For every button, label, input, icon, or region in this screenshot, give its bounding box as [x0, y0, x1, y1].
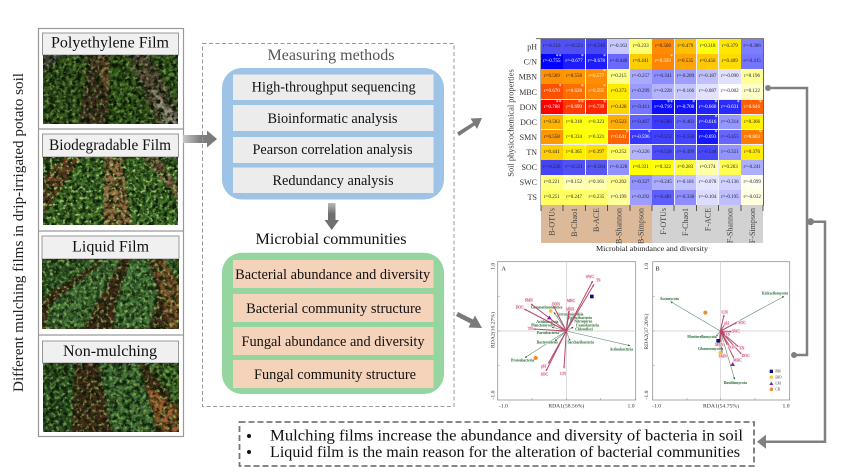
- callout: conclusions: Mulching films increase the abundance and diversity of bacteria in soil: [270, 428, 743, 445]
- heatmap: correlation matrix: r=0.196: [744, 74, 760, 79]
- heatmap: correlation matrix: r=-0.660: [699, 105, 716, 110]
- heatmap: correlation matrix: r=0.379: [722, 44, 738, 49]
- chart: RDA plot B: RDA2(37.20%): [643, 314, 650, 350]
- heatmap: correlation matrix: r=0.221: [544, 180, 560, 185]
- chart: RDA plot B: -1.0: [644, 390, 650, 399]
- heatmap: correlation matrix: r=0.247: [566, 195, 582, 200]
- heatmap: correlation matrix: *: [648, 130, 651, 136]
- heatmap: correlation matrix: r=0.366: [744, 120, 760, 125]
- connector: heatmap and RDA to conclusions: [757, 85, 825, 449]
- panel: microbial communities list: [222, 253, 444, 394]
- heatmap: correlation matrix: r=-0.136: [721, 180, 739, 185]
- chart: RDA plot A: Patescibacteria: [568, 316, 592, 320]
- panel: microbial communities list: Fungal community structure: [254, 367, 416, 383]
- heatmap: correlation matrix: r=0.373: [611, 89, 626, 94]
- chart: RDA plot A: A: [501, 265, 506, 272]
- chart: RDA plot B: DON: [728, 345, 736, 349]
- heatmap: correlation matrix: *: [625, 130, 628, 136]
- heatmap: correlation matrix: r=0.174: [700, 165, 716, 170]
- heatmap: correlation matrix: r=-0.241: [743, 165, 761, 170]
- heatmap: correlation matrix: r=0.161: [588, 180, 604, 185]
- heatmap: correlation matrix: *: [714, 130, 717, 136]
- heatmap: correlation matrix: r=-0.341: [654, 74, 672, 79]
- heatmap: correlation matrix: *: [714, 115, 717, 121]
- heatmap: correlation matrix: r=0.215: [611, 74, 626, 79]
- panel: polyethylene film: Polyethylene Film: [51, 35, 169, 52]
- heatmap: correlation matrix: r=0.628: [566, 89, 582, 94]
- heatmap: correlation matrix: r=0.376: [744, 150, 760, 155]
- heatmap: correlation matrix: r=-0.292: [632, 195, 650, 200]
- heatmap: correlation matrix: r=-0.228: [654, 89, 672, 94]
- heatmap axes and labels: SMN: [520, 133, 537, 142]
- heatmap: correlation matrix: r=0.535: [678, 59, 693, 64]
- chart: RDA plot A: Bacteroidetes: [537, 340, 558, 344]
- heatmap: correlation matrix: **: [556, 54, 562, 60]
- chart: RDA plot B: SOC: [738, 321, 746, 325]
- chart: RDA plot A: RDA1(58.56%): [548, 402, 584, 409]
- heatmap: correlation matrix: r=-0.523: [565, 44, 583, 49]
- heatmap axes and labels: DOC: [520, 118, 537, 127]
- heatmap axes and labels: pH: [527, 42, 537, 52]
- arrow: methods to communities: [324, 203, 339, 230]
- heatmap: correlation matrix: r=0.479: [678, 44, 693, 49]
- heatmap: correlation matrix: r=-0.299: [632, 89, 650, 94]
- panel: measuring methods list: Pearson correlation analysis: [252, 142, 413, 158]
- legend: [769, 370, 782, 392]
- heatmap: correlation matrix: r=0.646: [744, 105, 760, 110]
- panel: methods dashed frame: [202, 44, 454, 406]
- heatmap: correlation matrix: r=0.523: [611, 120, 626, 125]
- heatmap: correlation matrix: r=0.569: [544, 74, 560, 79]
- heatmap: correlation matrix: r=-0.032: [743, 195, 761, 200]
- heatmap: correlation matrix: r=-0.002: [721, 89, 739, 94]
- heatmap: correlation matrix: r=0.397: [588, 150, 604, 155]
- panel: polyethylene film: [42, 33, 178, 124]
- heatmap: correlation matrix: r=-0.588: [654, 120, 672, 125]
- chart: RDA plot A: SOC: [541, 372, 548, 376]
- chart: RDA plot B: RDA1(54.75%): [703, 402, 739, 409]
- heatmap axes and labels: Microbial abundance and diversity: [596, 244, 708, 253]
- chart: RDA plot A: DOC: [516, 306, 524, 310]
- heatmap: correlation matrix: r=0.577: [588, 74, 604, 79]
- chart: RDA plot B: TN: [739, 347, 744, 351]
- heatmap: correlation matrix: r=0.558: [566, 74, 582, 79]
- heatmap: correlation matrix: r=-0.327: [632, 180, 650, 185]
- chart: RDA plot B: SWC: [732, 330, 741, 334]
- heatmap: correlation matrix: *: [759, 130, 762, 136]
- heatmap: correlation matrix: r=-0.677: [565, 59, 583, 64]
- heatmap: correlation matrix: r=-0.549: [588, 44, 605, 49]
- chart: RDA plot A: Cyanobacteria: [576, 323, 599, 327]
- panel: biodegradable film: Biodegradable Film: [49, 137, 171, 154]
- chart: RDA plot A: RDA2(16.27%): [489, 312, 496, 348]
- heatmap: correlation matrix: *: [670, 54, 673, 60]
- heatmap: correlation matrix: r=-0.558: [543, 165, 561, 170]
- heatmap: correlation matrix: r=-0.099: [743, 180, 761, 185]
- heatmap: correlation matrix: r=-0.616: [699, 120, 716, 125]
- heatmap axes and labels: B-OTUs: [548, 208, 556, 236]
- heatmap: correlation matrix: *: [759, 100, 762, 106]
- heatmap axes and labels: TN: [526, 148, 537, 157]
- heatmap: correlation matrix: r=-0.181: [677, 180, 694, 185]
- heatmap: correlation matrix: r=0.334: [566, 135, 582, 140]
- heatmap: correlation matrix: r=-0.090: [721, 74, 739, 79]
- heatmap: correlation matrix: r=0.251: [544, 195, 560, 200]
- heatmap: correlation matrix: r=0.122: [744, 89, 760, 94]
- heatmap axes and labels: B-Chao1: [570, 208, 579, 237]
- chart: RDA plot A: Saccharibacteria: [567, 341, 594, 345]
- heatmap: correlation matrix: r=-0.415: [743, 59, 761, 64]
- chart: RDA plot B: TS: [726, 332, 730, 336]
- heatmap: correlation matrix: *: [714, 100, 717, 106]
- heatmap: correlation matrix: r=0.263: [722, 165, 738, 170]
- chart: RDA plot A: -1.0: [499, 403, 508, 409]
- heatmap: correlation matrix: r=0.283: [678, 165, 693, 170]
- heatmap: correlation matrix: r=-0.166: [677, 89, 694, 94]
- heatmap: correlation matrix: r=0.318: [566, 120, 582, 125]
- arrow: methods to heatmap: [457, 118, 482, 136]
- heatmap axes and labels: MBC: [519, 88, 537, 97]
- heatmap axes and labels: B-ACE: [592, 208, 601, 232]
- chart: RDA plot A: MBN: [566, 308, 575, 312]
- heatmap: correlation matrix: r=0.670: [544, 89, 560, 94]
- heatmap: correlation matrix: r=-0.314: [721, 120, 739, 125]
- heatmap: correlation matrix: r=-0.257: [632, 74, 650, 79]
- chart: RDA plot A: 1.0: [490, 263, 496, 270]
- heatmap: correlation matrix: r=0.580: [655, 44, 671, 49]
- heatmap: correlation matrix: r=0.699: [566, 105, 582, 110]
- heatmap: correlation matrix: r=-0.572: [654, 135, 672, 140]
- chart: RDA plot A: C/N: [560, 372, 566, 376]
- chart: RDA plot B: C/N: [722, 310, 728, 314]
- chart: RDA plot B: Mortierellomycota: [687, 335, 717, 339]
- chart: RDA plot B: 1.0: [782, 403, 790, 409]
- heatmap axes and labels: SWC: [520, 178, 537, 187]
- heatmap: correlation matrix: r=-0.693: [699, 135, 716, 140]
- chart: RDA plot A: SWC: [586, 275, 595, 279]
- heatmap axes and labels: MBN: [519, 73, 537, 82]
- heatmap: correlation matrix: r=0.409: [722, 59, 738, 64]
- chart: RDA plot B: DOC: [742, 354, 750, 358]
- heatmap: correlation matrix: r=-0.755: [543, 59, 561, 64]
- heatmap: correlation matrix: r=-0.448: [610, 59, 627, 64]
- legend: CK: [775, 388, 781, 392]
- chart: RDA plot A: Planctomycetes: [531, 324, 556, 328]
- heatmap: correlation matrix: r=0.252: [611, 150, 626, 155]
- heading: microbial communities: Microbial communities: [256, 231, 406, 248]
- callout: conclusions: Liquid film is the main reason for the alteration of bacterial communities: [270, 444, 740, 461]
- heatmap: correlation matrix: r=0.152: [566, 180, 582, 185]
- chart: RDA plot B: B: [655, 265, 660, 272]
- chart: RDA plot B: Basidiomycota: [724, 381, 747, 385]
- heatmap: correlation matrix: *: [603, 69, 606, 75]
- heatmap: correlation matrix: r=0.199: [611, 195, 626, 200]
- heatmap: correlation matrix: r=0.641: [611, 135, 626, 140]
- heatmap: correlation matrix: r=0.322: [655, 165, 671, 170]
- heatmap axes and labels: [506, 39, 764, 253]
- heatmap: correlation matrix: *: [581, 54, 584, 60]
- chart: RDA plot A: TS: [596, 278, 600, 282]
- heatmap: correlation matrix: r=-0.631: [721, 105, 739, 110]
- panel: measuring methods list: High-throughput sequencing: [252, 80, 416, 96]
- heatmap: correlation matrix: r=0.323: [588, 120, 604, 125]
- heatmap: correlation matrix: r=0.788: [544, 105, 560, 110]
- chart: RDA plot A: [489, 262, 636, 409]
- heatmap: correlation matrix: r=-0.455: [721, 135, 739, 140]
- panel: liquid film: Liquid Film: [72, 239, 149, 256]
- heatmap: correlation matrix: r=-0.321: [721, 150, 739, 155]
- chart: RDA plot B: 1.0: [644, 263, 650, 270]
- heatmap: correlation matrix: [541, 39, 763, 205]
- chart: RDA plot A: DON: [552, 302, 560, 306]
- heatmap: correlation matrix: r=-0.516: [543, 44, 561, 49]
- heatmap axes and labels: B-Shannon: [614, 208, 624, 244]
- heatmap: correlation matrix: *: [692, 100, 695, 106]
- arrow: treatments to methods: [183, 130, 217, 148]
- heatmap: correlation matrix: r=-0.289: [677, 74, 694, 79]
- heatmap: correlation matrix: r=0.318: [700, 44, 716, 49]
- panel: non-mulching: Non-mulching: [63, 343, 157, 360]
- panel: liquid film: [42, 236, 179, 329]
- heatmap: correlation matrix: r=-0.521: [565, 165, 583, 170]
- heatmap: correlation matrix: *: [559, 84, 562, 90]
- heatmap: correlation matrix: r=-0.548: [699, 150, 716, 155]
- chart: RDA plot A: Actinobacteria: [610, 348, 633, 352]
- heatmap: correlation matrix: *: [603, 84, 606, 90]
- heatmap: correlation matrix: r=-0.187: [699, 74, 716, 79]
- panel: mulching treatments: [38, 28, 184, 436]
- heatmap: correlation matrix: r=0.331: [633, 165, 649, 170]
- heatmap: correlation matrix: r=-0.481: [654, 195, 672, 200]
- chart: RDA plot B: -1.0: [652, 403, 661, 409]
- chart: RDA plot B: Glomeromycota: [698, 347, 723, 351]
- chart: RDA plot B: SMN: [719, 354, 727, 358]
- heatmap: correlation matrix: *: [581, 84, 584, 90]
- heatmap: correlation matrix: r=-0.163: [610, 44, 627, 49]
- chart: RDA plot A: Acidobacteria: [536, 320, 558, 324]
- heatmap: correlation matrix: r=0.321: [588, 135, 604, 140]
- heatmap axes and labels: F-ACE: [704, 208, 712, 231]
- heatmap: correlation matrix: r=0.441: [544, 150, 560, 155]
- heatmap: correlation matrix: r=-0.104: [699, 195, 716, 200]
- heatmap axes and labels: F-Chao1: [681, 208, 690, 236]
- chart: RDA plot A: -1.0: [490, 390, 496, 399]
- heatmap: correlation matrix: **: [578, 100, 584, 106]
- heatmap: correlation matrix: r=-0.226: [632, 150, 650, 155]
- arrow: communities to RDA: [456, 312, 482, 328]
- heatmap: correlation matrix: r=-0.678: [588, 59, 605, 64]
- heatmap: correlation matrix: r=-0.716: [654, 105, 672, 110]
- heatmap: correlation matrix: r=-0.708: [677, 105, 694, 110]
- chart: RDA plot B: [643, 262, 790, 409]
- panel: biodegradable film: [42, 134, 178, 225]
- heatmap: correlation matrix: **: [556, 100, 562, 106]
- legend: LM: [775, 382, 782, 386]
- heatmap: correlation matrix: r=-0.596: [632, 135, 650, 140]
- heatmap axes and labels: F-Simpson: [748, 208, 757, 243]
- heatmap: correlation matrix: *: [603, 54, 606, 60]
- panel: microbial communities list: Fungal abundance and diversity: [242, 334, 425, 350]
- heading: measuring methods: Measuring methods: [268, 47, 394, 64]
- chart: RDA plot A: TN: [528, 327, 533, 331]
- heatmap: correlation matrix: *: [603, 100, 606, 106]
- chart: RDA plot A: Parcubacteria: [537, 331, 559, 335]
- heatmap: correlation matrix: r=0.428: [611, 105, 626, 110]
- heatmap: correlation matrix: r=-0.411: [632, 105, 649, 110]
- heatmap: correlation matrix: r=-0.338: [677, 195, 694, 200]
- panel: measuring methods list: Bioinformatic analysis: [268, 111, 398, 127]
- heatmap: correlation matrix: r=0.365: [566, 150, 582, 155]
- chart: RDA plot B: Kickxellomycota: [762, 292, 788, 296]
- heatmap axes and labels: F-Shannon: [726, 208, 734, 243]
- heatmap axes and labels: C/N: [524, 58, 537, 66]
- heatmap: correlation matrix: r=0.202: [611, 180, 626, 185]
- heatmap: correlation matrix: r=-0.087: [699, 89, 716, 94]
- chart: RDA plot B: MBC: [733, 358, 742, 362]
- heatmap: correlation matrix: r=0.441: [633, 59, 649, 64]
- panel: measuring methods list: [222, 68, 444, 200]
- heatmap: correlation matrix: *: [737, 100, 740, 106]
- vertical title: Different mulching films in drip-irrigated potato soil: [11, 73, 27, 392]
- heatmap: correlation matrix: r=0.503: [544, 120, 560, 125]
- heatmap: correlation matrix: r=0.603: [744, 135, 760, 140]
- heatmap axes and labels: SOC: [521, 163, 537, 172]
- heatmap: correlation matrix: r=0.456: [700, 59, 716, 64]
- chart: RDA plot B: Ascomycota: [660, 297, 679, 301]
- chart: RDA plot A: SMN: [525, 299, 533, 303]
- legend: PM: [775, 370, 781, 374]
- heatmap: correlation matrix: r=0.558: [544, 135, 560, 140]
- panel: non-mulching: [42, 341, 179, 432]
- heatmap: correlation matrix: r=0.593: [655, 59, 671, 64]
- legend: BIO: [775, 376, 782, 380]
- chart: RDA plot A: Verrucomicrobia: [557, 313, 583, 317]
- heatmap: correlation matrix: r=0.595: [588, 89, 604, 94]
- heatmap: correlation matrix: r=-0.504: [588, 165, 605, 170]
- chart: RDA plot A: Gemmatimonadetes: [531, 306, 563, 310]
- heatmap axes and labels: B-Simpson: [636, 208, 646, 244]
- heatmap: correlation matrix: r=-0.245: [654, 180, 672, 185]
- panel: microbial communities list: Bacterial abundance and diversity: [235, 267, 431, 283]
- heatmap: correlation matrix: r=-0.463: [677, 120, 694, 125]
- chart: RDA plot A: pH: [541, 364, 546, 368]
- chart: RDA plot A: Proteobacteria: [511, 359, 534, 363]
- heatmap: correlation matrix: r=-0.558: [677, 135, 694, 140]
- chart: RDA plot A: MBC: [567, 299, 576, 303]
- heatmap: correlation matrix: r=-0.499: [677, 150, 694, 155]
- heatmap: correlation matrix: r=-0.386: [743, 44, 761, 49]
- callout: conclusions: [240, 422, 754, 466]
- heatmap: correlation matrix: r=-0.538: [654, 150, 672, 155]
- panel: measuring methods list: Redundancy analysis: [272, 173, 394, 189]
- heatmap: correlation matrix: r=-0.195: [721, 195, 739, 200]
- heatmap axes and labels: TS: [528, 193, 537, 202]
- heatmap axes and labels: Soil physicochemical properties: [506, 69, 516, 177]
- chart: RDA plot A: Nitrospirae: [574, 319, 593, 323]
- heatmap: correlation matrix: r=-0.078: [699, 180, 716, 185]
- heatmap: correlation matrix: r=-0.467: [632, 120, 650, 125]
- panel: microbial communities list: Bacterial community structure: [246, 301, 421, 317]
- heatmap: correlation matrix: r=0.233: [633, 44, 649, 49]
- heatmap axes and labels: F-OTUs: [659, 208, 668, 235]
- chart: RDA plot B: pH: [724, 322, 729, 326]
- heatmap: correlation matrix: r=0.235: [588, 195, 604, 200]
- heatmap: correlation matrix: **: [667, 100, 673, 106]
- chart: RDA plot A: 1.0: [627, 403, 635, 409]
- heatmap: correlation matrix: r=-0.328: [610, 165, 627, 170]
- chart: RDA plot A: Chloroflexi: [575, 327, 593, 331]
- heatmap axes and labels: DON: [520, 103, 537, 112]
- heatmap: correlation matrix: r=0.739: [588, 105, 604, 110]
- chart: RDA plot B: MBN: [715, 343, 724, 347]
